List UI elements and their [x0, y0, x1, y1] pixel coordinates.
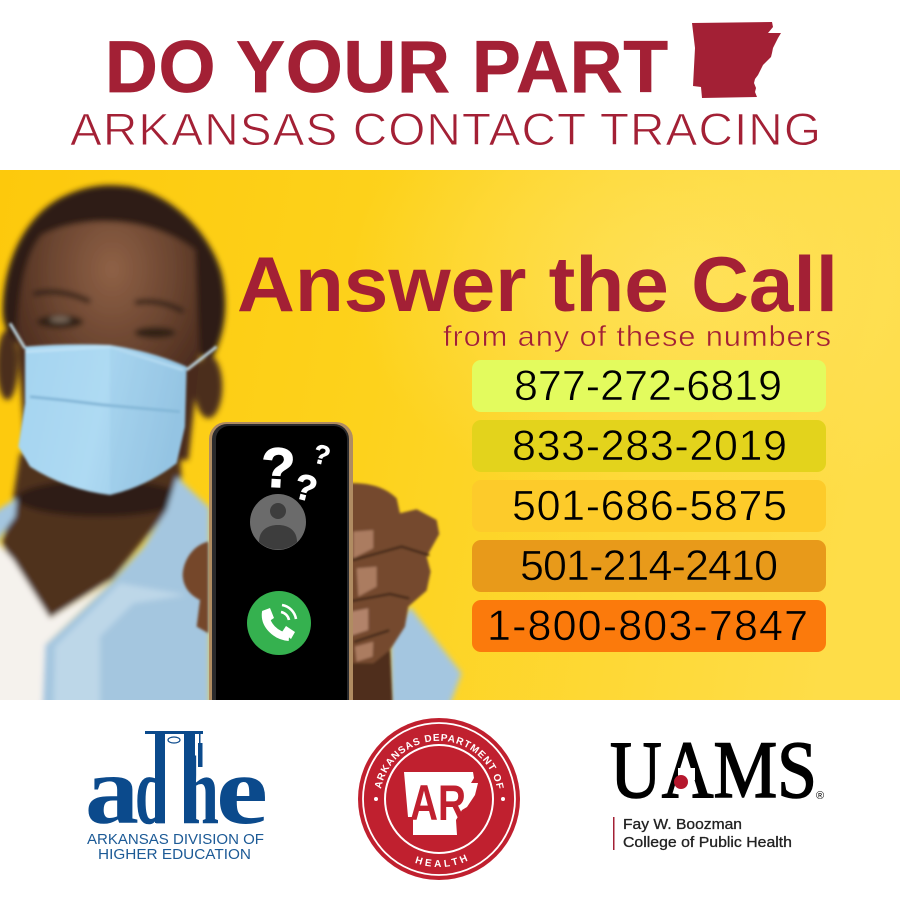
logo: ADHE: h	[182, 737, 219, 845]
logo: ADHE: e	[216, 737, 268, 845]
phone screen	[216, 426, 347, 726]
fingers	[348, 547, 428, 642]
hair	[3, 185, 225, 357]
logo: ADHE: d	[135, 737, 167, 845]
logo: ADHE: ARKANSAS DIVISION OF	[87, 832, 264, 848]
finger nails	[353, 530, 373, 558]
logo: ADHE	[85, 731, 268, 863]
phone body	[209, 422, 353, 700]
phone number 1: 877-272-6819	[514, 362, 782, 410]
phone number 1	[472, 360, 826, 412]
neck and chest	[2, 453, 182, 618]
phone number 4	[472, 540, 826, 592]
icon: small question mark: ?	[310, 438, 333, 472]
logo: UAMS Boozman College: UAMS	[610, 724, 817, 815]
tee	[0, 540, 112, 700]
phone number 2: 833-283-2019	[512, 422, 787, 470]
forearm	[347, 643, 393, 723]
logo: Arkansas Department of Health seal	[358, 718, 520, 880]
logo: UAMS Boozman College: Fay W. Boozman	[623, 817, 742, 833]
back of hand and finger mass	[353, 481, 441, 664]
phone number 4: 501-214-2410	[520, 542, 778, 590]
phone with incoming call	[209, 422, 353, 700]
face	[17, 222, 200, 460]
logo: ADHE: a	[85, 737, 139, 845]
mask straps	[10, 323, 217, 370]
icon: caller avatar	[250, 494, 306, 550]
phone number 5: 1-800-803-7847	[487, 602, 808, 650]
title: do your part: DO YOUR PART	[105, 27, 668, 108]
heading: answer the call: Answer the Call	[237, 240, 838, 328]
phone number 3: 501-686-5875	[512, 482, 787, 530]
text: from any of these numbers: from any of these numbers	[443, 321, 832, 353]
logo: UAMS Boozman College	[610, 724, 824, 851]
ears	[0, 330, 18, 400]
mask	[18, 344, 187, 495]
photo: man in mask	[0, 185, 462, 723]
panel: yellow photo banner	[0, 170, 900, 700]
icon: large question mark: ?	[259, 435, 297, 500]
logo: Arkansas Department of Health seal: AR	[410, 775, 466, 831]
icon: medium question mark: ?	[290, 465, 322, 510]
icon: green answer button	[247, 591, 311, 655]
logo: Arkansas Department of Health seal: HEALTH	[415, 854, 468, 867]
logo: UAMS Boozman College: College of Public Health	[623, 835, 792, 851]
logo: ADHE: HIGHER EDUCATION	[98, 847, 251, 863]
denim jacket	[0, 477, 210, 723]
logo: UAMS Boozman College: ®	[816, 790, 824, 802]
eyes	[37, 315, 83, 328]
left thumb	[183, 542, 208, 633]
subtitle: Arkansas contact tracing: ARKANSAS CONTACT TRACING	[70, 104, 822, 155]
brows	[33, 292, 90, 302]
icon: Arkansas state silhouette	[692, 22, 781, 98]
logo: Arkansas Department of Health seal: ARKANSAS DEPARTMENT OF	[374, 734, 504, 789]
